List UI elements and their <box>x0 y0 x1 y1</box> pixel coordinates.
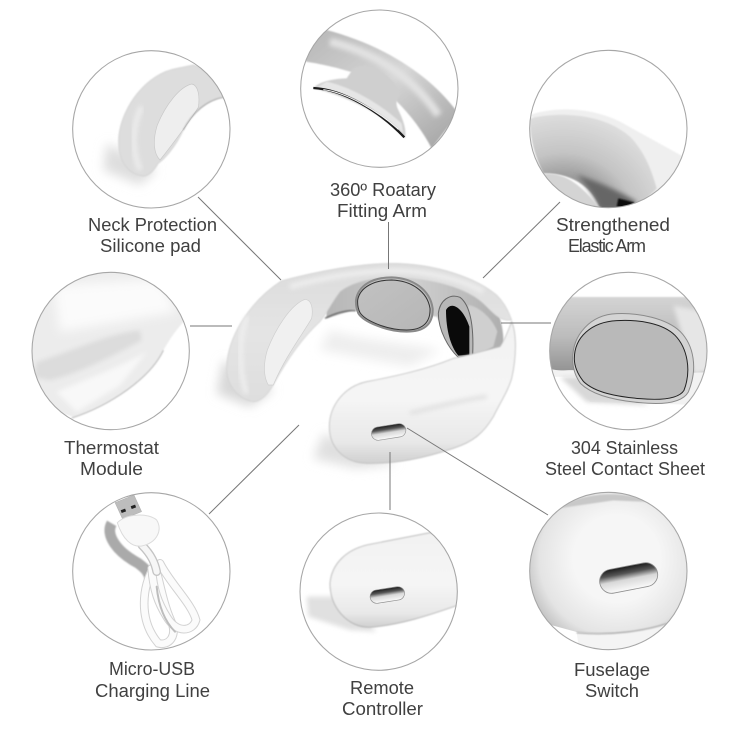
lower bulge <box>61 360 138 409</box>
label: neck protection silicone pad: Silicone pad <box>100 236 201 256</box>
groove <box>33 330 142 380</box>
label: neck protection silicone pad: Neck Protection <box>88 215 217 235</box>
neck band and left lobe <box>227 263 512 402</box>
label: 304 stainless steel contact sheet: 304 Stainless <box>571 438 678 458</box>
label: micro-USB charging line: Charging Line <box>95 681 210 701</box>
USB connector <box>115 495 142 519</box>
rotary stem <box>313 66 405 138</box>
band top highlight <box>290 271 483 292</box>
inner face of band <box>325 270 504 360</box>
power button <box>370 423 407 441</box>
pad <box>154 84 199 160</box>
label: strengthened elastic arm <box>556 215 670 256</box>
panel: fuselage switch <box>527 492 690 655</box>
body <box>527 492 690 633</box>
central product: neck massager <box>217 263 515 468</box>
label: fuselage switch: Fuselage <box>574 660 650 680</box>
panel: remote controller <box>300 513 458 670</box>
label: 360 rotary fitting arm: Fitting Arm <box>337 201 427 221</box>
soft highlight <box>410 397 487 413</box>
label: thermostat module: Module <box>80 459 143 479</box>
band behind <box>547 297 710 375</box>
panel: 360 rotary fitting arm <box>300 10 458 167</box>
label: strengthened elastic arm: Elastic Arm <box>568 236 646 256</box>
dark inner fold <box>577 175 637 210</box>
label: remote controller: Remote <box>350 678 414 698</box>
fuselage <box>330 533 458 627</box>
leader lines <box>190 197 560 515</box>
highlight edge <box>532 110 682 194</box>
arm <box>530 115 657 210</box>
rotating arm plate <box>438 296 497 357</box>
device shadows <box>217 330 440 468</box>
label: 360 rotary fitting arm: 360º Roatary <box>330 180 436 200</box>
panel: 304 stainless steel contact sheet <box>547 272 713 430</box>
panel: strengthened elastic arm <box>530 50 687 210</box>
right side and front lobe <box>329 322 515 463</box>
plate <box>573 314 694 403</box>
lobe ridge highlight <box>240 317 247 393</box>
label: micro-USB charging line <box>95 659 210 701</box>
switch <box>599 562 658 594</box>
label: fuselage switch <box>574 660 650 701</box>
lower band edge <box>325 311 356 318</box>
label: 304 stainless steel contact sheet <box>545 438 705 479</box>
plate edge <box>313 88 404 137</box>
label: 360 rotary fitting arm <box>330 180 436 221</box>
neck protection silicone pad <box>264 299 312 385</box>
label: thermostat module <box>64 438 159 479</box>
ridge <box>134 107 142 170</box>
stainless contact plate <box>356 277 433 332</box>
shadow <box>307 597 377 632</box>
surface <box>30 272 187 417</box>
panel: micro-USB charging line <box>73 493 230 650</box>
band <box>300 30 458 148</box>
inner reflection <box>543 174 600 208</box>
label: strengthened elastic arm: Strengthened <box>556 215 670 235</box>
label: fuselage switch: Switch <box>585 681 639 701</box>
label: micro-USB charging line: Micro-USB <box>109 659 195 679</box>
cable loops <box>142 545 196 644</box>
lower strip <box>577 624 665 649</box>
top shade <box>562 494 645 508</box>
label: thermostat module: Thermostat <box>64 438 159 458</box>
upper highlight <box>56 280 172 330</box>
label: 304 stainless steel contact sheet: Steel Contact Sheet <box>545 459 705 479</box>
lobe <box>119 65 224 176</box>
button <box>369 586 405 604</box>
label: remote controller: Controller <box>342 699 423 719</box>
label: remote controller <box>342 678 423 719</box>
lower white band <box>552 369 704 404</box>
panel: thermostat module <box>30 272 189 430</box>
panel: neck protection silicone pad <box>73 51 230 208</box>
cable shadow loop <box>110 523 150 578</box>
label: neck protection silicone pad <box>88 215 217 256</box>
edge <box>72 350 163 418</box>
USB plug body <box>117 515 159 546</box>
pad shadow <box>103 143 157 185</box>
